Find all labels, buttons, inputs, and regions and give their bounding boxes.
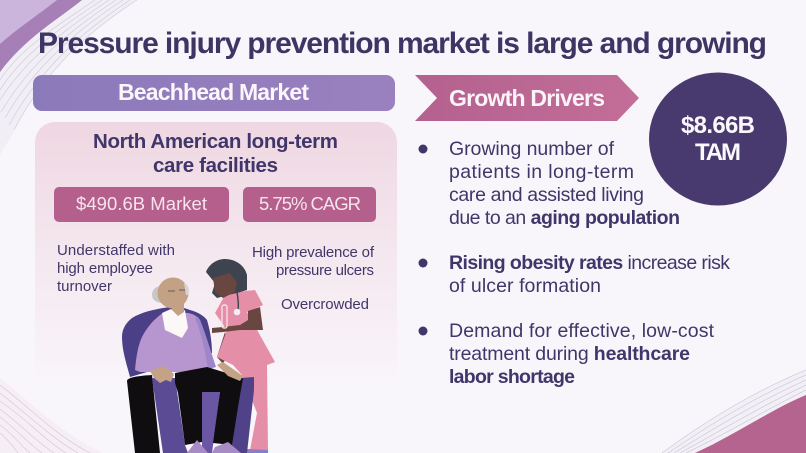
card heading — [93, 130, 338, 177]
text: understaffed: Understaffed with — [57, 242, 175, 259]
stat pill: CAGR: 5.75% CAGR — [259, 193, 361, 214]
growth driver: aging population — [418, 138, 680, 229]
chair back — [122, 307, 212, 377]
growth driver: aging population: Growing number of — [449, 138, 615, 160]
TAM circle: $8.66B — [681, 112, 755, 139]
growth driver: labor shortage: labor shortage — [449, 366, 575, 388]
panel: beachhead market — [33, 75, 397, 390]
arrow: growth drivers — [415, 75, 639, 121]
beachhead header bar: Beachhead Market — [118, 79, 309, 105]
title: Pressure injury prevention market is large and growing — [38, 27, 767, 60]
text: understaffed: high employee — [57, 260, 153, 277]
chair seat panel — [202, 392, 220, 453]
arrow: growth drivers: Growth Drivers — [449, 85, 605, 111]
patient — [127, 278, 243, 453]
illustration: nurse with seated patient — [122, 259, 275, 453]
text: understaffed — [57, 242, 175, 295]
growth driver: obesity: Rising obesity rates increase risk — [449, 252, 730, 274]
text: prevalence and overcrowding — [252, 244, 375, 313]
text: prevalence and overcrowding: High prevalence of — [252, 244, 375, 261]
growth driver: labor shortage: Demand for effective, low-cost — [449, 320, 715, 342]
TAM circle — [649, 72, 787, 206]
growth driver: aging population: care and assisted living — [449, 184, 644, 206]
card heading: care facilities — [153, 154, 278, 177]
bottom-left decorative swoosh — [0, 378, 102, 453]
card heading: North American long-term — [93, 130, 338, 153]
bottom-right decorative swoosh — [662, 370, 806, 453]
TAM circle: TAM — [695, 139, 741, 166]
stat pill: market size: $490.6B Market — [76, 193, 207, 214]
chair right arm — [226, 377, 254, 453]
text: understaffed: turnover — [57, 278, 112, 295]
growth driver: labor shortage: treatment during healthcare — [449, 343, 690, 365]
beachhead header bar — [33, 75, 395, 111]
text: prevalence and overcrowding: Overcrowded — [281, 296, 369, 313]
stat pill: CAGR — [243, 187, 376, 222]
growth driver: aging population: due to an aging population — [449, 207, 680, 229]
text: prevalence and overcrowding: pressure ulcers — [276, 262, 374, 279]
growth driver: labor shortage — [418, 320, 715, 388]
stat pill: market size — [54, 187, 229, 222]
growth driver: obesity — [418, 252, 730, 297]
top-left decorative swoosh — [0, 0, 137, 155]
nurse — [206, 259, 275, 453]
growth driver: aging population: patients in long-term — [449, 161, 634, 183]
facilities card background — [35, 122, 397, 390]
growth driver: obesity: of ulcer formation — [449, 275, 601, 297]
